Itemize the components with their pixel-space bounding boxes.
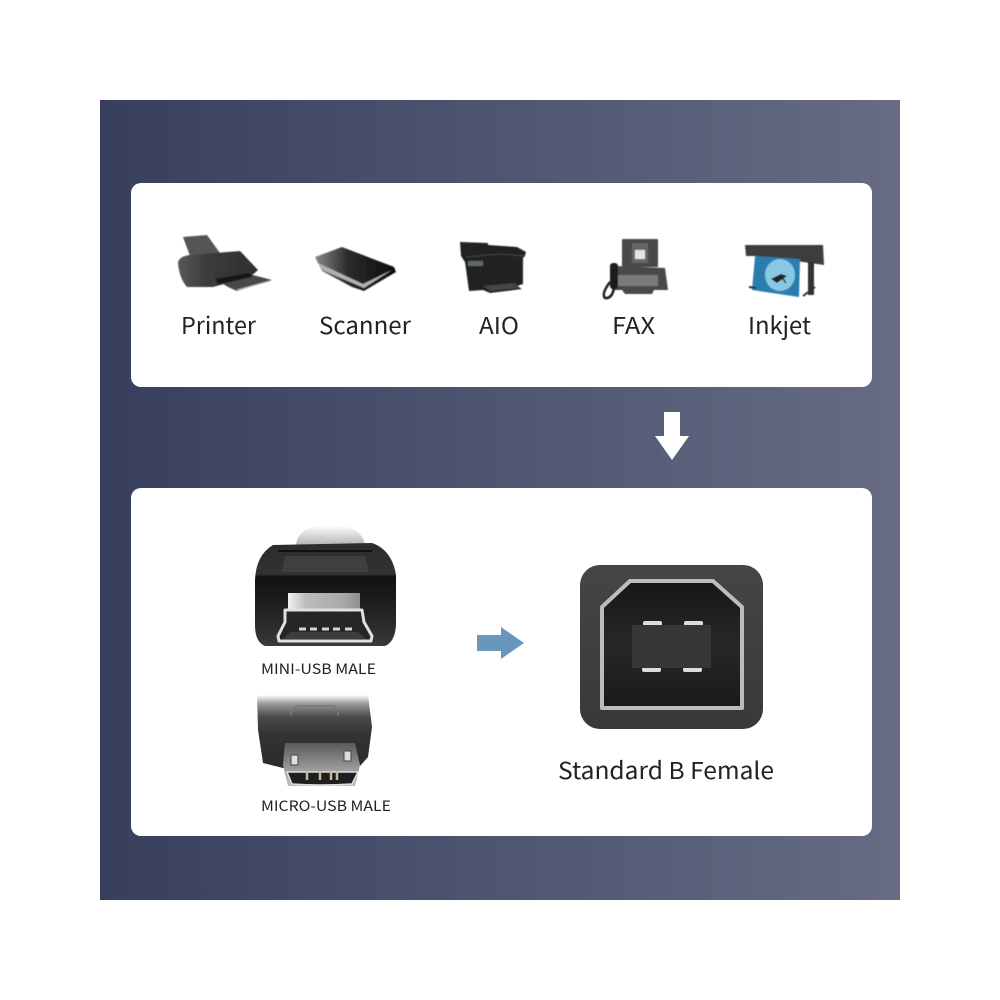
label: Standard B Female: Standard B Female [558, 752, 774, 786]
arrow: white down arrow [655, 412, 689, 460]
label: AIO: AIO [479, 307, 519, 341]
icon: micro-USB male plug [257, 695, 372, 786]
background panel [100, 100, 900, 900]
label: Printer: Printer [181, 307, 257, 341]
icon: all-in-one printer [460, 242, 526, 293]
icon: printer [178, 235, 272, 291]
label: MINI-USB MALE: MINI-USB MALE [261, 658, 376, 679]
label: Inkjet: Inkjet [748, 307, 811, 341]
icon: mini-USB male plug [255, 525, 396, 646]
icon: standard B female port [580, 565, 763, 729]
icon: inkjet plotter [745, 245, 824, 297]
icon: scanner [315, 247, 396, 291]
panel: connectors [131, 488, 872, 836]
label: Scanner: Scanner [319, 307, 412, 341]
label: MICRO-USB MALE: MICRO-USB MALE [261, 795, 391, 816]
label: FAX: FAX [612, 307, 656, 341]
panel: devices [131, 183, 872, 387]
icon: fax machine [604, 239, 668, 298]
arrow: blue right arrow [477, 627, 524, 659]
